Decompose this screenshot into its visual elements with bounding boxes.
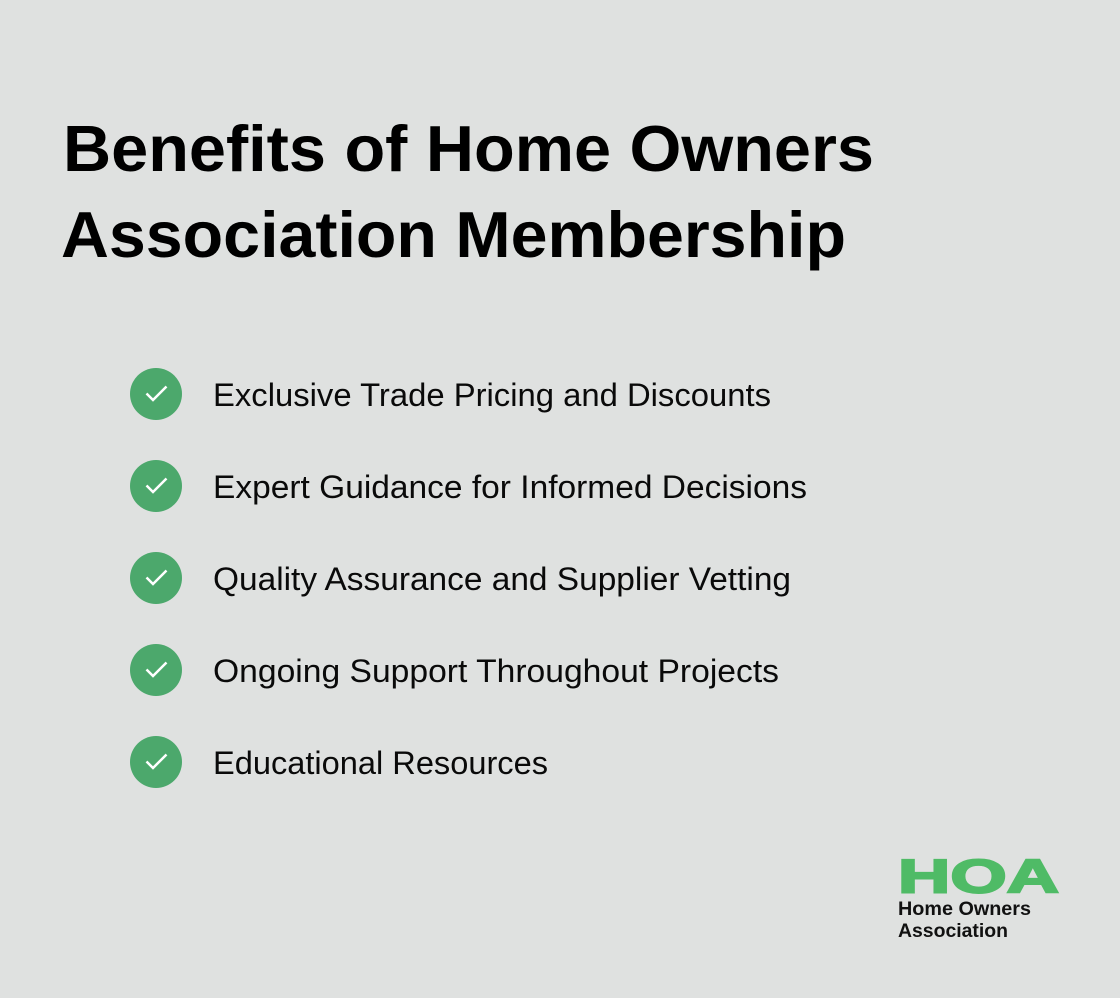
- title: [61, 112, 874, 271]
- logo: HOA: [898, 850, 1059, 942]
- logo: HOA: HOA: [898, 850, 1059, 902]
- benefit: quality assurance: [130, 552, 791, 604]
- benefit: educational resources: [130, 736, 548, 788]
- benefit: expert guidance: [130, 460, 807, 512]
- benefits list: [130, 368, 807, 788]
- benefit: ongoing support: [130, 644, 779, 696]
- benefit: expert guidance: Expert Guidance for Informed Decisions: [213, 469, 807, 505]
- benefit: trade pricing: Exclusive Trade Pricing and Discounts: [213, 377, 771, 413]
- benefit: trade pricing: [130, 368, 771, 420]
- title: Benefits of Home Owners: [63, 112, 874, 185]
- benefit: ongoing support: Ongoing Support Throughout Projects: [213, 653, 779, 689]
- benefit: quality assurance: Quality Assurance and Supplier Vetting: [213, 561, 791, 597]
- logo: HOA: Home Owners: [898, 899, 1031, 920]
- logo: HOA: Association: [898, 921, 1008, 942]
- title: Association Membership: [61, 198, 846, 271]
- benefit: educational resources: Educational Resources: [213, 745, 548, 781]
